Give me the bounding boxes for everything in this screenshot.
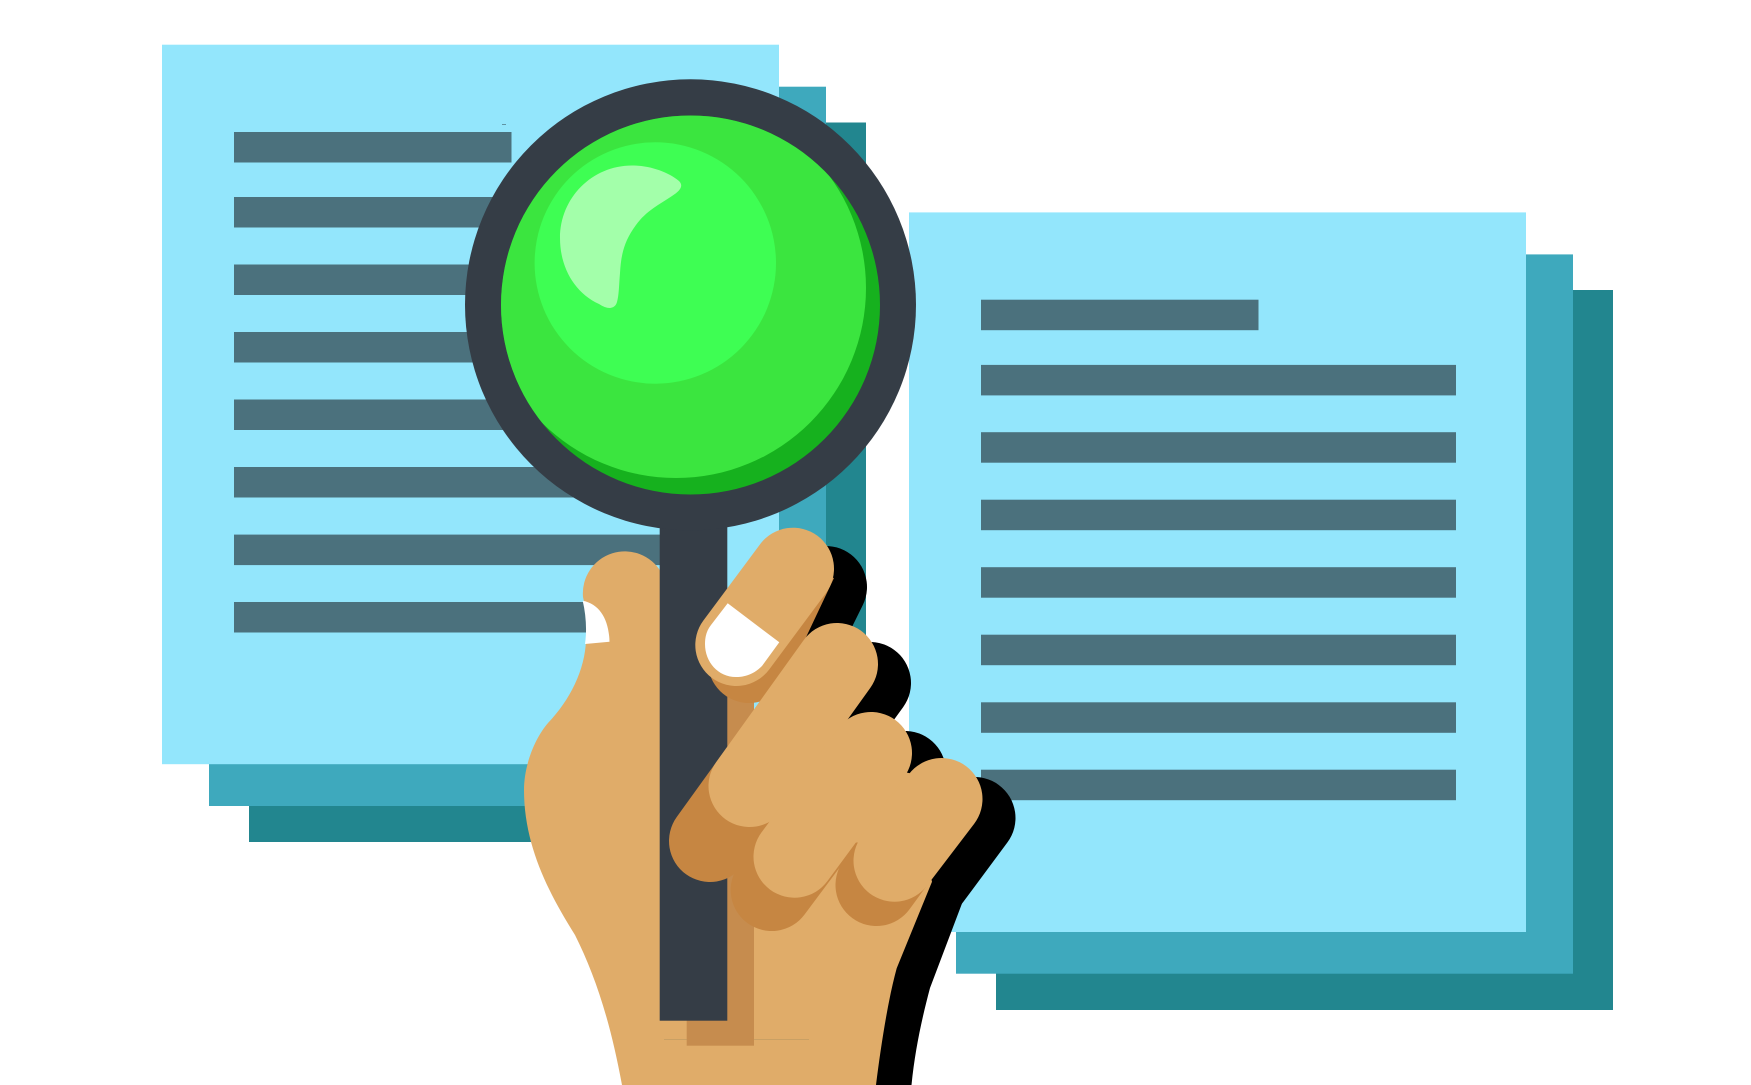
panel: left document stack bbox=[162, 45, 866, 842]
front page bbox=[909, 212, 1526, 932]
magnifying glass handle shadow bbox=[687, 680, 754, 1046]
front page bbox=[162, 45, 779, 764]
little finger bbox=[894, 799, 942, 861]
palm crease bbox=[664, 1039, 809, 1040]
hand black shadow bbox=[657, 587, 974, 1085]
middle page bbox=[209, 87, 826, 806]
hand palm and thumb bbox=[524, 551, 932, 1085]
fingers bbox=[736, 569, 942, 861]
thumb nail bbox=[583, 601, 610, 644]
middle finger bbox=[750, 664, 837, 786]
handle bbox=[660, 500, 727, 1021]
middle page bbox=[956, 254, 1573, 974]
ring finger bbox=[794, 753, 871, 857]
back page bbox=[996, 290, 1613, 1010]
panel: right document stack bbox=[909, 212, 1613, 1010]
lens highlight bbox=[560, 166, 681, 308]
text lines bbox=[234, 124, 709, 632]
filler between ring and little fingers bbox=[852, 770, 918, 843]
illustration: hand holding magnifying glass over documents bbox=[162, 44, 1613, 1085]
index finger nail bbox=[705, 603, 779, 677]
index finger bbox=[736, 569, 793, 645]
frame bbox=[465, 79, 916, 530]
text lines bbox=[981, 300, 1456, 800]
magnifying glass bbox=[465, 79, 916, 1021]
finger shadows bbox=[708, 560, 894, 890]
back page bbox=[249, 122, 866, 842]
lens bbox=[501, 116, 880, 494]
